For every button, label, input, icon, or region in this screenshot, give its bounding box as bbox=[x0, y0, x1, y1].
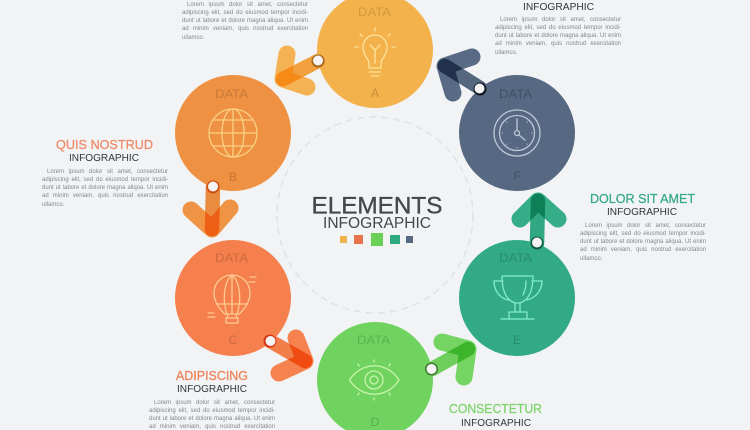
circle B: globe: B bbox=[229, 170, 237, 184]
circle A: light bulb: A bbox=[371, 86, 379, 100]
circle C: balloon: C bbox=[229, 333, 238, 347]
heading: adipiscing: ADIPISCING bbox=[176, 369, 248, 383]
circle C: balloon bbox=[175, 240, 291, 356]
text block: B: Lorem ipsum dolor sit amet, consectetur bbox=[47, 169, 168, 175]
text block: A: ad minim veniam, quis nostrud exercitation bbox=[182, 26, 308, 32]
text block: B: adipiscing elit, sed do eiusmod tempor incidi- bbox=[42, 177, 168, 183]
heading: dolor sit amet: INFOGRAPHIC bbox=[607, 206, 677, 218]
text block: B: dunt ut labore et dolore magna aliqua. Ut enim bbox=[42, 185, 168, 191]
text block: F: adipiscing elit, sed do eiusmod tempor incidi- bbox=[495, 25, 621, 31]
text block: F: Lorem ipsum dolor sit amet, consectetur bbox=[500, 17, 621, 23]
heading: consectetur bbox=[449, 402, 542, 429]
icon: globe bbox=[209, 109, 257, 157]
text block: C: Lorem ipsum dolor sit amet, consectetur bbox=[154, 400, 275, 406]
text block: C: dunt ut labore et dolore magna aliqua. Ut enim bbox=[149, 416, 275, 422]
arrow: A to B bbox=[283, 54, 324, 87]
heading: consectetur: INFOGRAPHIC bbox=[461, 417, 531, 429]
heading: quis nostrud bbox=[56, 138, 153, 164]
heading: adipiscing: INFOGRAPHIC bbox=[177, 383, 247, 395]
title bbox=[312, 192, 442, 232]
text block: A: ullamco. bbox=[182, 35, 204, 41]
heading: quis nostrud: QUIS NOSTRUD bbox=[56, 138, 153, 152]
text block: A bbox=[182, 2, 308, 41]
arrow: F to A bbox=[445, 57, 486, 96]
heading: consectetur: CONSECTETUR bbox=[449, 402, 542, 416]
heading: quis nostrud: INFOGRAPHIC bbox=[69, 152, 139, 164]
text block: F bbox=[495, 16, 621, 56]
text block: A: Lorem ipsum dolor sit amet, consectetur bbox=[187, 2, 308, 8]
text block: E: Lorem ipsum dolor sit amet, consectetur bbox=[585, 223, 706, 229]
text block: E: ullamco. bbox=[580, 256, 602, 262]
circle A: light bulb bbox=[317, 0, 433, 108]
heading: adipiscing bbox=[176, 369, 248, 395]
circle D: eye bbox=[317, 322, 433, 430]
text block: E: adipiscing elit, sed do eiusmod tempor incidi- bbox=[580, 231, 706, 237]
circle C: balloon: DATA bbox=[215, 251, 248, 265]
text block: B: ullamco. bbox=[42, 202, 64, 208]
text block: B bbox=[42, 168, 168, 208]
text block: B: ad minim veniam, quis nostrud exercitation bbox=[42, 193, 168, 199]
text block: A: adipiscing elit, sed do eiusmod tempor incidi- bbox=[182, 10, 308, 16]
text block: E: dunt ut labore et dolore magna aliqua. Ut enim bbox=[580, 239, 706, 245]
circle B: globe bbox=[175, 75, 291, 191]
colour legend squares bbox=[340, 233, 413, 246]
circle D: eye: D bbox=[371, 415, 380, 429]
icon: light bulb bbox=[355, 28, 395, 76]
circle D: eye: DATA bbox=[357, 333, 390, 347]
heading: dolor sit amet bbox=[590, 192, 695, 218]
icon: eye bbox=[350, 360, 399, 400]
arrow: C to D bbox=[264, 334, 305, 373]
text block: F: ad minim veniam, quis nostrud exercitation bbox=[495, 41, 621, 47]
central dashed ring bbox=[277, 117, 473, 313]
circle E: trophy bbox=[459, 240, 575, 356]
icon: clock bbox=[494, 110, 540, 156]
title: INFOGRAPHIC bbox=[323, 215, 431, 232]
circle F: clock: DATA bbox=[499, 87, 532, 101]
circle A: light bulb: DATA bbox=[358, 5, 391, 19]
circle F: clock bbox=[459, 75, 575, 191]
text block: F: ullamco. bbox=[495, 50, 517, 56]
heading: F partial: INFOGRAPHIC bbox=[523, 1, 594, 13]
text block: E: ad minim veniam, quis nostrud exercitation bbox=[580, 247, 706, 253]
arrow: E to F bbox=[520, 201, 558, 250]
circle E: trophy: DATA bbox=[499, 251, 532, 265]
circle F: clock: F bbox=[513, 169, 521, 183]
icon: hot air balloon bbox=[208, 275, 256, 323]
text block: C bbox=[149, 400, 275, 430]
text block: A: dunt ut labore et dolore magna aliqua. Ut enim bbox=[182, 18, 308, 24]
arrow: B to C bbox=[191, 180, 230, 229]
title: ELEMENTS bbox=[312, 192, 442, 220]
text block: C: adipiscing elit, sed do eiusmod tempor incidi- bbox=[149, 408, 275, 414]
text block: E bbox=[580, 222, 706, 262]
arrow: D to E bbox=[425, 342, 468, 377]
circle E: trophy: E bbox=[513, 333, 521, 347]
circle B: globe: DATA bbox=[215, 87, 248, 101]
heading: dolor sit amet: DOLOR SIT AMET bbox=[590, 192, 695, 206]
text block: F: dunt ut labore et dolore magna aliqua. Ut enim bbox=[495, 33, 621, 39]
icon: trophy bbox=[494, 276, 542, 319]
